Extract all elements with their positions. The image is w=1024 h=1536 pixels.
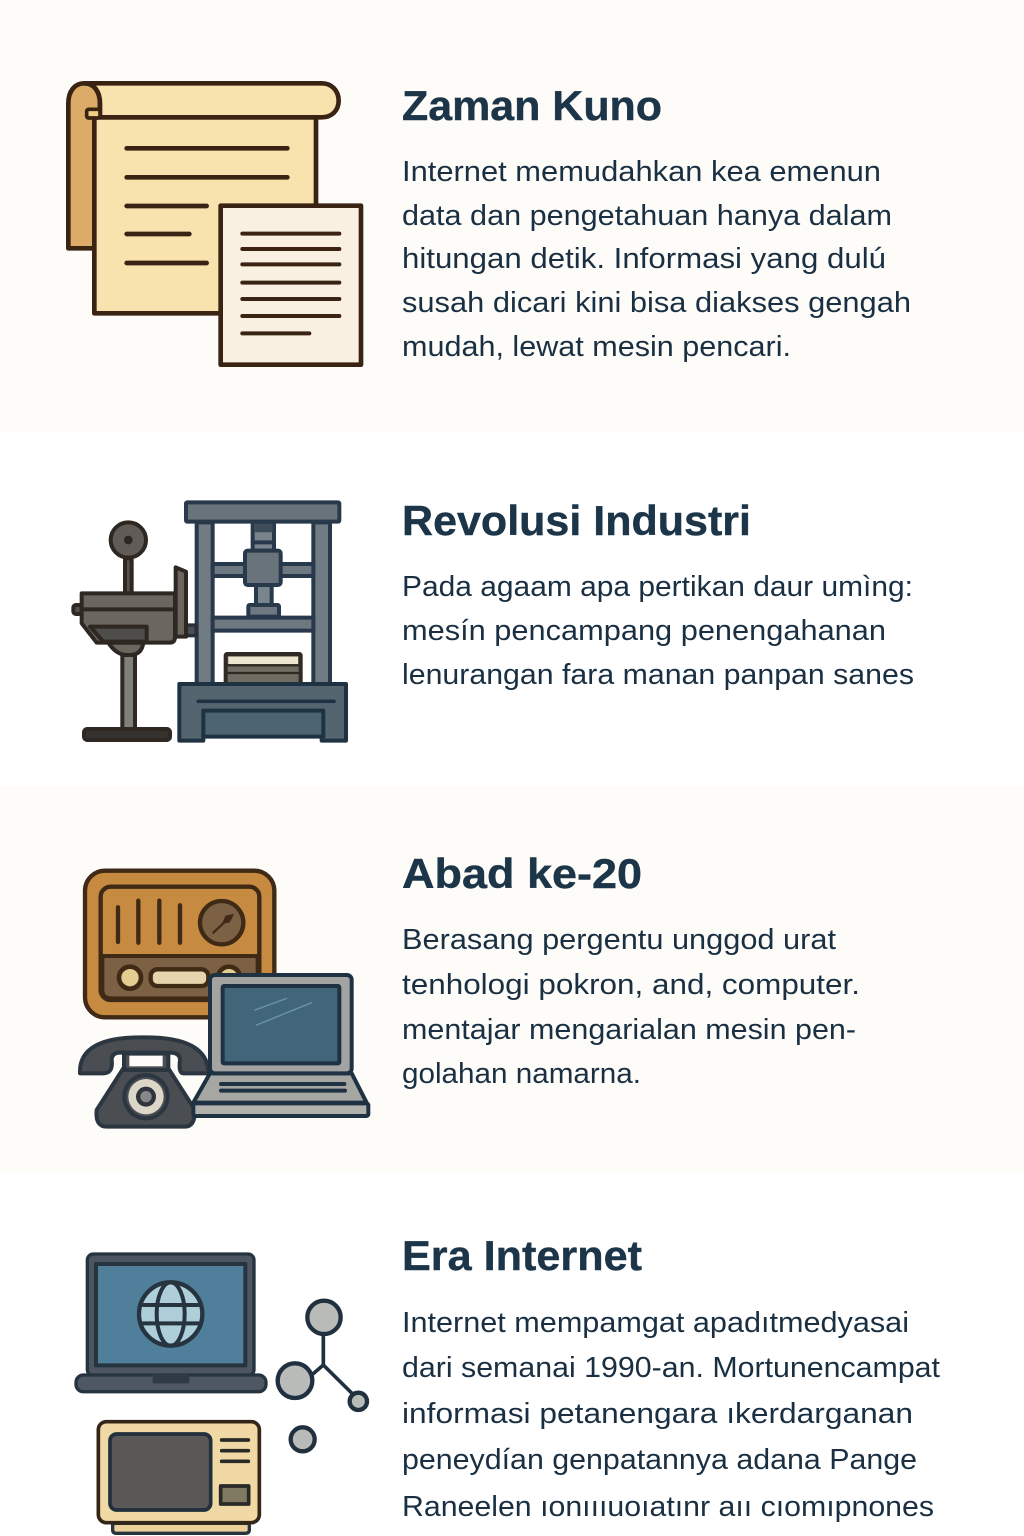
text: zaman kuno body: Internet memudahkan kea emenun bbox=[402, 156, 881, 188]
text: era internet body: peneydían genpatannya adana Pange bbox=[402, 1444, 917, 1476]
text: revolusi industri body: mesín pencampang penengahanan bbox=[402, 615, 886, 647]
icon: scroll and paper bbox=[68, 83, 361, 365]
icon: network nodes bbox=[278, 1301, 367, 1451]
icon: radio bbox=[85, 871, 274, 1017]
icon: laptop with globe bbox=[76, 1254, 266, 1392]
text: abad ke-20 body: mentajar mengarialan mesin pen- bbox=[402, 1014, 856, 1046]
text: era internet body bbox=[402, 1307, 940, 1523]
heading: revolusi industri: Revolusi Industri bbox=[402, 497, 751, 544]
text: revolusi industri body bbox=[402, 571, 914, 691]
icon: laptop bbox=[193, 975, 368, 1116]
text: abad ke-20 body bbox=[402, 924, 860, 1090]
heading: era internet: Era Internet bbox=[402, 1232, 642, 1279]
icon: radio, telephone and laptop bbox=[80, 871, 368, 1127]
text: abad ke-20 body: Berasang pergentu unggod urat bbox=[402, 924, 836, 956]
text: era internet body: Raneelen ıonıııuoıatınr aıı cıomıpnones bbox=[402, 1491, 934, 1523]
text: zaman kuno body: hitungan detik. Informasi yang dulú bbox=[402, 243, 886, 275]
heading: zaman kuno: Zaman Kuno bbox=[402, 82, 662, 129]
text: zaman kuno body: data dan pengetahuan hanya dalam bbox=[402, 200, 892, 232]
text: abad ke-20 body: tenhologi pokron, and, computer. bbox=[402, 969, 860, 1001]
text: era internet body: informasi petanengara ıkerdarganan bbox=[402, 1398, 913, 1430]
text: revolusi industri body: Pada agaam apa pertikan daur umìng: bbox=[402, 571, 913, 603]
text: era internet body: Internet mempamgat apadıtmedyasai bbox=[402, 1307, 909, 1339]
panel: era internet bbox=[0, 1172, 1024, 1536]
text: zaman kuno body bbox=[402, 156, 911, 363]
icon: printing press bbox=[73, 502, 346, 741]
text: abad ke-20 body: golahan namarna. bbox=[402, 1058, 641, 1090]
panel: revolusi industri bbox=[0, 432, 1024, 786]
panel: abad ke-20 bbox=[0, 786, 1024, 1172]
icon: retro computer bbox=[98, 1422, 259, 1533]
text: era internet body: dari semanai 1990-an. Mortunencampat bbox=[402, 1352, 940, 1384]
icon: telephone bbox=[80, 1037, 208, 1127]
text: zaman kuno body: mudah, lewat mesin pencari. bbox=[402, 331, 791, 363]
text: zaman kuno body: susah dicari kini bisa diakses gengah bbox=[402, 287, 911, 319]
text: revolusi industri body: lenurangan fara manan panpan sanes bbox=[402, 659, 914, 691]
panel: zaman kuno bbox=[0, 0, 1024, 432]
icon: laptop, network and computer bbox=[76, 1254, 367, 1533]
heading: abad ke-20: Abad ke-20 bbox=[402, 850, 642, 897]
